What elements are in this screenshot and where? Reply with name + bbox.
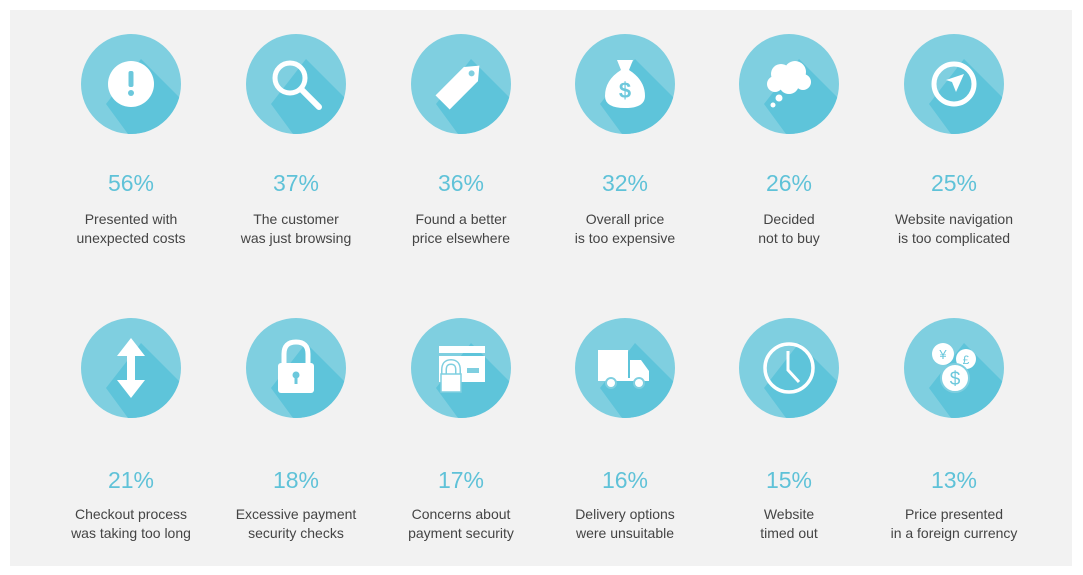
- item: 17% payment security: Concerns about: [412, 506, 511, 522]
- item: 16% delivery: were unsuitable: [575, 525, 674, 541]
- item: 37% browsing: was just browsing: [240, 230, 351, 246]
- item: 15% timed out: Website: [764, 506, 814, 522]
- icon: truck: [575, 318, 705, 463]
- item: 36% better price: [338, 0, 614, 246]
- item: 16% delivery: [575, 318, 705, 541]
- item: 15% timed out: 15%: [766, 467, 812, 493]
- icon: coins: ¥: [938, 347, 947, 362]
- icon: coins: [904, 318, 1034, 463]
- item: 21% checkout: 21%: [108, 467, 154, 493]
- item: 56% unexpected costs: Presented with: [85, 211, 177, 227]
- item: 36% better price: 36%: [438, 170, 484, 196]
- item: 18% security checks: security checks: [248, 525, 344, 541]
- item: 37% browsing: 37%: [273, 170, 319, 196]
- icon: coins: £: [963, 353, 970, 367]
- icon: tag: [338, 0, 614, 244]
- item: 18% security checks: [236, 318, 376, 541]
- item: 21% checkout: was taking too long: [70, 525, 191, 541]
- icon: magnifier: [246, 34, 376, 179]
- item: 26% decided: [739, 34, 869, 246]
- item: 21% checkout: [70, 318, 211, 541]
- item: 32% expensive: [575, 34, 705, 246]
- item: 25% navigation: [895, 34, 1034, 246]
- item: 21% checkout: Checkout process: [75, 506, 187, 522]
- item: 16% delivery: 16%: [602, 467, 648, 493]
- item: 56% unexpected costs: unexpected costs: [77, 230, 185, 246]
- item: 17% payment security: [408, 318, 541, 541]
- item: 32% expensive: Overall price: [586, 211, 664, 227]
- item: 25% navigation: Website navigation: [895, 211, 1013, 227]
- item: 15% timed out: timed out: [760, 525, 818, 541]
- icon: money bag: $: [619, 78, 631, 103]
- item: 18% security checks: 18%: [273, 467, 319, 493]
- item: 16% delivery: Delivery options: [575, 506, 675, 522]
- item: 18% security checks: Excessive payment: [236, 506, 356, 522]
- item: 56% unexpected costs: [77, 34, 211, 246]
- item: 36% better price: price elsewhere: [412, 230, 510, 246]
- item: 32% expensive: is too expensive: [575, 230, 675, 246]
- item: 56% unexpected costs: 56%: [108, 170, 154, 196]
- icon: money bag: [575, 34, 705, 179]
- icon: exclamation: [81, 34, 211, 179]
- item: 17% payment security: 17%: [438, 467, 484, 493]
- item: 13% foreign currency: [891, 318, 1034, 541]
- item: 13% foreign currency: 13%: [931, 467, 977, 493]
- item: 17% payment security: payment security: [408, 525, 514, 541]
- item: 25% navigation: is too complicated: [898, 230, 1010, 246]
- icon: up-down arrow: [81, 318, 211, 463]
- item: 36% better price: Found a better: [415, 211, 507, 227]
- item: 26% decided: not to buy: [758, 230, 820, 246]
- item: 37% browsing: The customer: [253, 211, 339, 227]
- icon: coins: $: [950, 369, 961, 390]
- item: 15% timed out: [739, 318, 869, 541]
- item: 13% foreign currency: Price presented: [905, 506, 1003, 522]
- item: 25% navigation: 25%: [931, 170, 977, 196]
- icon: clock: [739, 318, 869, 463]
- item: 32% expensive: 32%: [602, 170, 648, 196]
- item: 37% browsing: [240, 34, 376, 246]
- icon: thought cloud: [739, 34, 869, 179]
- icon: padlock: [246, 318, 376, 463]
- item: 13% foreign currency: in a foreign currency: [891, 525, 1017, 541]
- icon: card with lock: [411, 318, 541, 463]
- item: 26% decided: 26%: [766, 170, 812, 196]
- item: 26% decided: Decided: [763, 211, 815, 227]
- icon: compass: [904, 34, 1034, 179]
